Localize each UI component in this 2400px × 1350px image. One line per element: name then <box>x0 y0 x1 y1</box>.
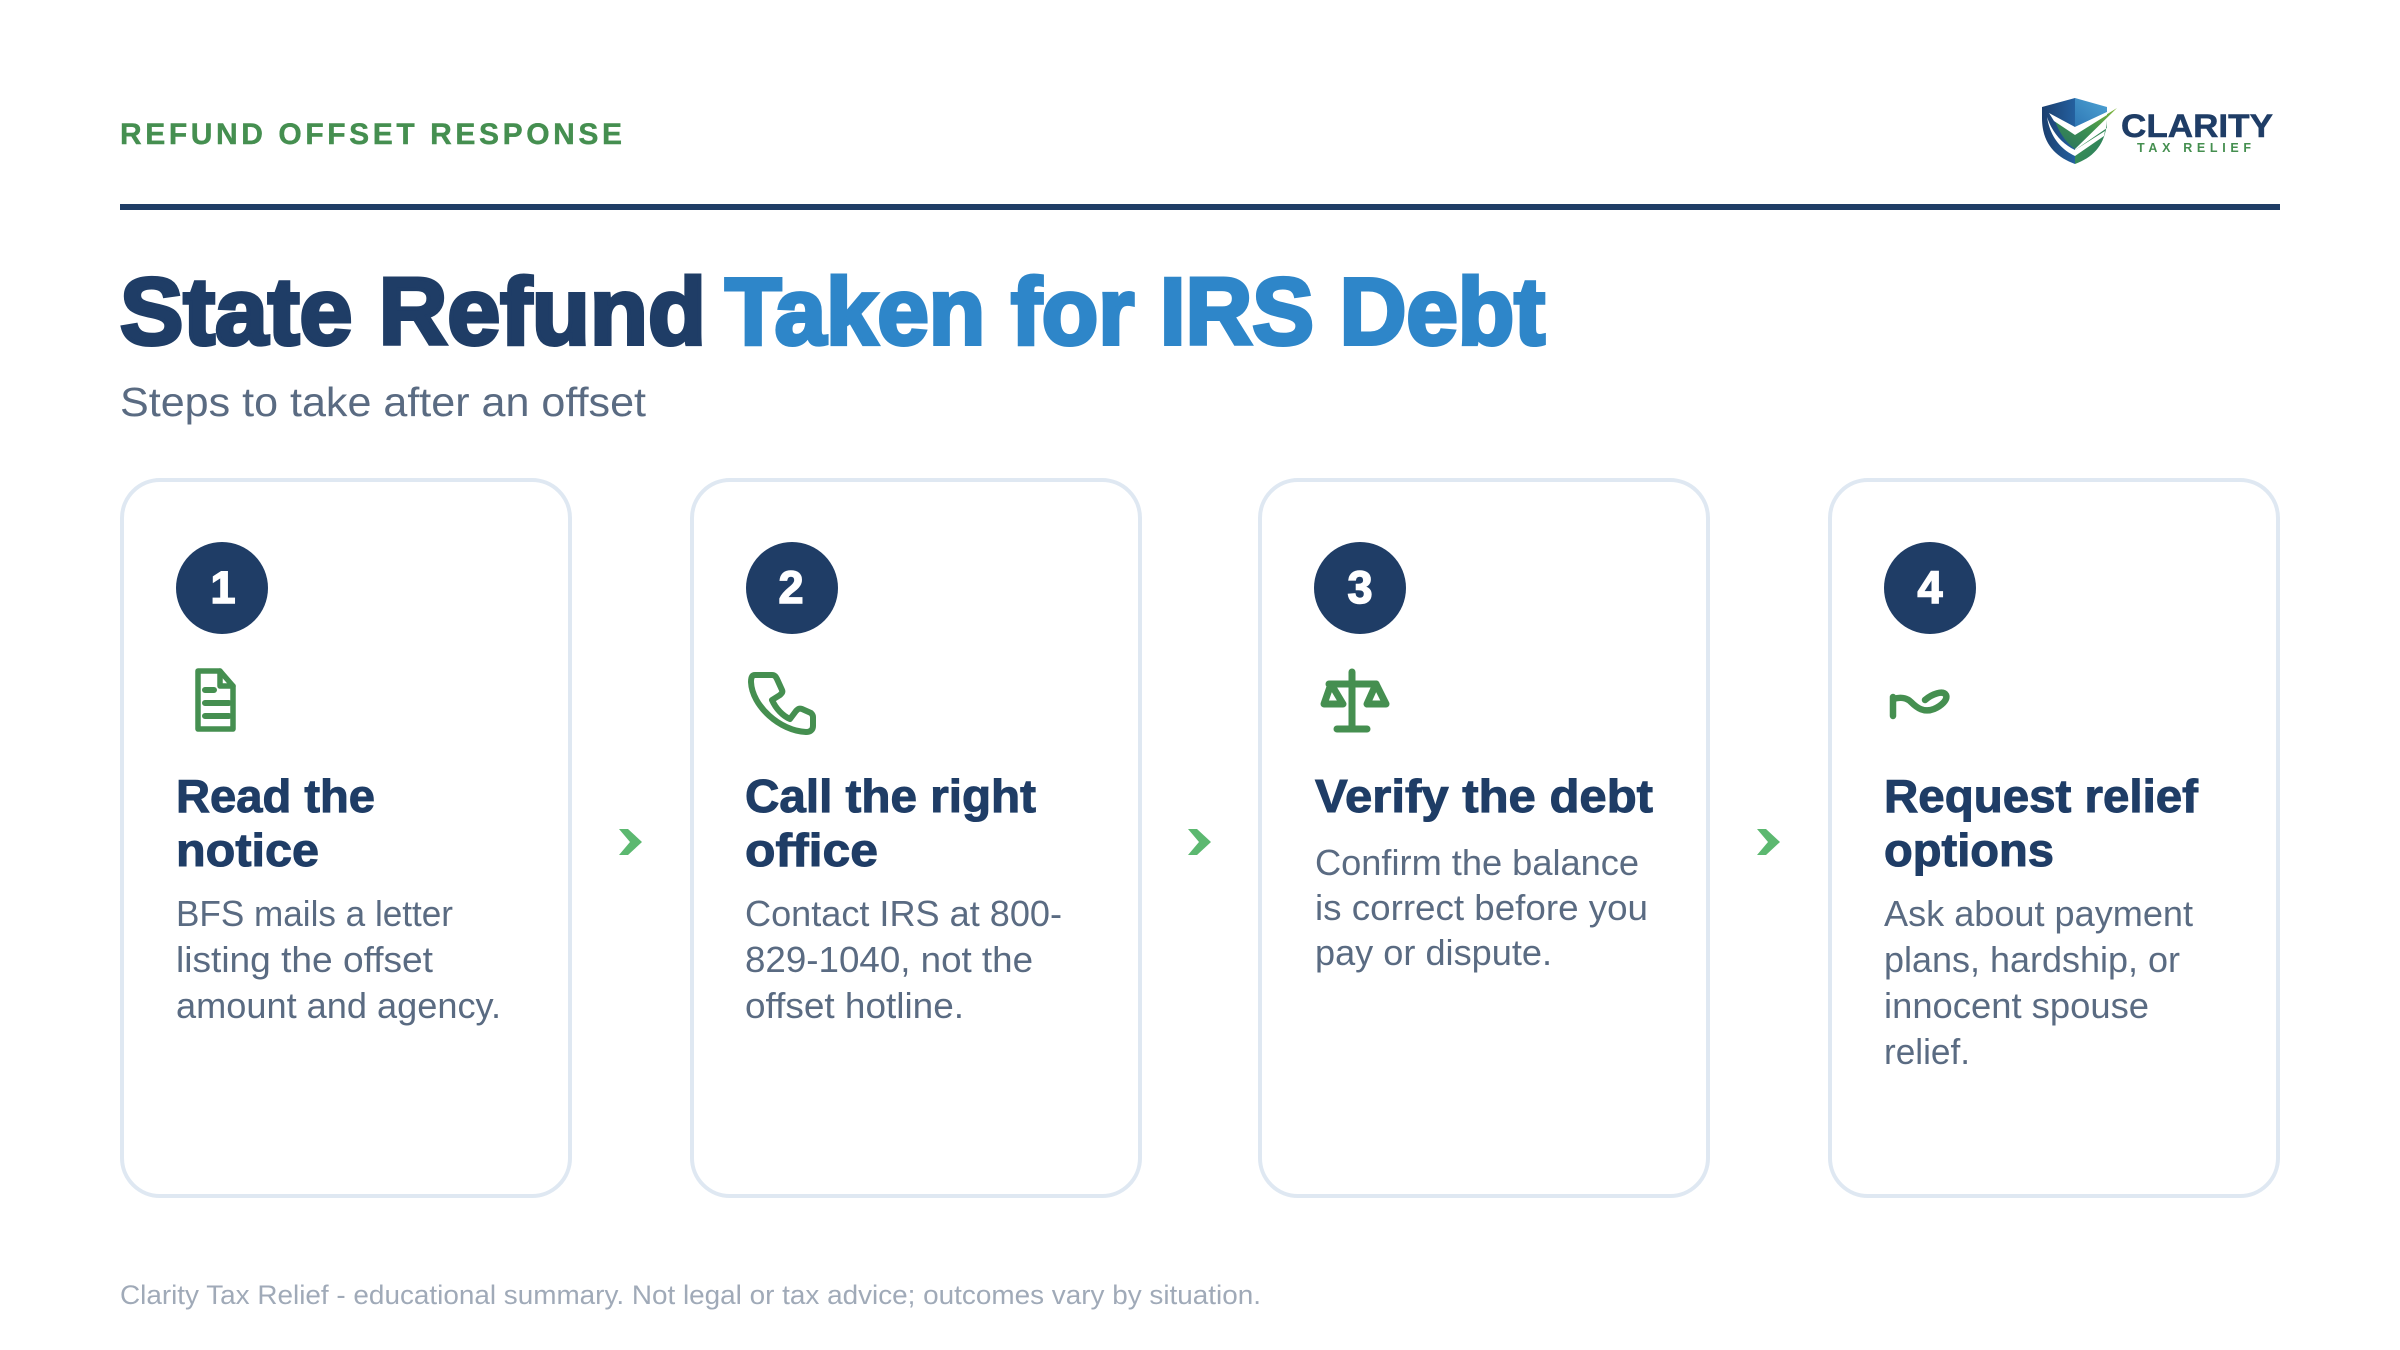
heading: read the notice <box>176 770 375 876</box>
body text: is correct before you <box>1315 887 1648 928</box>
body text: pay or dispute. <box>1315 932 1552 973</box>
heading: request relief options <box>1884 770 2199 876</box>
body text <box>1315 842 1648 973</box>
panel: step 2 call the right office <box>692 480 1140 1196</box>
step number 1: 1 <box>210 562 236 613</box>
panel: step 3 verify the debt <box>1260 480 1708 1196</box>
arrow 2 <box>1188 829 1211 855</box>
step number 4 <box>1884 542 1976 634</box>
body text: innocent spouse <box>1884 985 2149 1026</box>
body text: Contact IRS at 800- <box>745 893 1062 934</box>
header rule <box>120 204 2280 210</box>
body text: amount and agency. <box>176 985 501 1026</box>
body text <box>745 893 1062 1026</box>
logo: Clarity Tax Relief <box>2042 98 2273 164</box>
heading: read the notice: Read the <box>176 770 375 822</box>
title: State Refund <box>120 259 706 365</box>
icon: document <box>198 671 233 729</box>
heading: read the notice: notice <box>176 824 319 876</box>
panel: step 1 read the notice <box>122 480 570 1196</box>
heading: request relief options: options <box>1884 824 2054 876</box>
heading: call the right office <box>745 770 1036 876</box>
logo: Clarity Tax Relief: TAX RELIEF <box>2137 141 2251 155</box>
heading: call the right office: Call the right <box>745 770 1036 822</box>
heading: call the right office: office <box>745 824 878 876</box>
step number 3 <box>1314 542 1406 634</box>
step number 4: 4 <box>1917 562 1943 613</box>
step number 1 <box>176 542 268 634</box>
step number 3: 3 <box>1347 562 1373 613</box>
subtitle: Steps to take after an offset <box>120 379 647 425</box>
heading: request relief options: Request relief <box>1884 770 2199 822</box>
icon: phone <box>751 675 813 732</box>
arrow 3 <box>1757 829 1780 855</box>
body text: offset hotline. <box>745 985 964 1026</box>
body text: 829-1040, not the <box>745 939 1033 980</box>
icon: balance scales <box>1324 672 1386 729</box>
body text: plans, hardship, or <box>1884 939 2180 980</box>
title: Taken for IRS Debt <box>725 259 1545 365</box>
step number 2: 2 <box>778 562 804 613</box>
heading: verify the debt: Verify the debt <box>1315 770 1653 822</box>
step number 2 <box>746 542 838 634</box>
body text <box>176 893 501 1026</box>
logo: Clarity Tax Relief: CLARITY <box>2121 108 2273 144</box>
arrow 1 <box>619 829 642 855</box>
eyebrow label: REFUND OFFSET RESPONSE <box>120 118 622 151</box>
panel: step 4 request relief options <box>1830 480 2278 1196</box>
body text: BFS mails a letter <box>176 893 453 934</box>
footer disclaimer: Clarity Tax Relief - educational summary. Not legal or tax advice; outcomes vary by situation. <box>120 1280 1261 1310</box>
icon: hand <box>1893 693 1946 716</box>
body text: relief. <box>1884 1031 1970 1072</box>
body text: listing the offset <box>176 939 433 980</box>
body text <box>1884 893 2193 1072</box>
body text: Confirm the balance <box>1315 842 1639 883</box>
body text: Ask about payment <box>1884 893 2193 934</box>
